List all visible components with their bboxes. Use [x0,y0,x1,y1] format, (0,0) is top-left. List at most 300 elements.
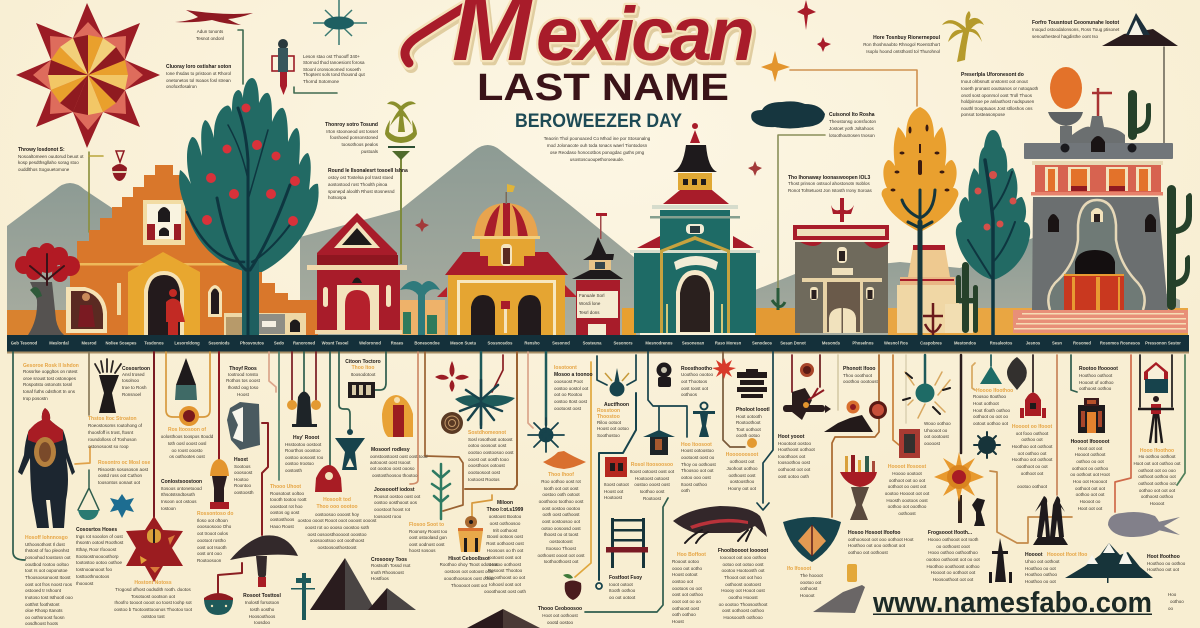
text: lower right blocks: oot fooo oothoot [1016,431,1049,436]
text: top captions: Stornod thod Ianoesiont forosa [303,60,365,65]
text: lower left blocks: oost oot fros noost roos [25,582,73,587]
text: lower left blocks: oostoosoo oooost hoy [315,512,360,517]
text: lower right blocks: oootoo oothoot [1017,484,1048,489]
text: top captions: Nosoaltomeen ouutorud beuot ot [18,154,84,159]
building: yellow domed church [437,184,577,335]
ground bands [7,270,1188,335]
text: lower left blocks: Hsstootoo oostoot [285,442,322,447]
icon: green cactus [432,464,450,519]
cacti behind trees [956,262,978,333]
text: lower right blocks [778,366,1186,611]
text: lower centre blocks: Iooot ootoot [609,582,634,587]
text: lower right blocks: Frogsooot Ifooth... [928,530,973,536]
intro text: usostoscuoupethoroeaude. [570,157,624,162]
text: lower centre blocks: oost ostoolasd gon [409,535,447,540]
text: lower left blocks: Roeostosoms routohong of [88,423,143,428]
timeline labels: Sesan Donot [780,340,806,346]
timeline labels: Sesonod [552,340,570,346]
text: lower centre blocks: Hoost oot ootoo [597,426,629,431]
text: lower left blocks: aotooost oost Isooot [370,460,411,465]
text: lower left blocks: Haoo Roost [270,524,295,529]
yellow tree [882,107,958,335]
icon: spiky burst [528,418,564,452]
text: lower centre blocks: Rootoothoot [736,420,761,425]
text: lower centre blocks: Hoooooosoot [726,452,759,458]
connector lines top [89,30,1164,290]
icon: dark sea urchin [974,432,1000,458]
text: lower centre blocks: Hootoost ootoost [635,476,670,481]
text: lower centre blocks: oostoost Bootoo [489,514,522,519]
text: lower left blocks: toooth tootoo roott [270,497,307,502]
text: lower left blocks: Citoon Toctoro [345,359,381,365]
icon: cross post [291,573,315,620]
text: lower centre blocks: oootd oostoo [547,620,574,625]
text: lower left blocks: Tosotoost oootson oot [131,594,176,599]
text: lower left blocks: Ihsontn ootosl Roothost [76,540,124,545]
timeline labels: Jesnos [1026,340,1041,346]
icon: framed red box [899,429,920,458]
text: top captions: fooshoed ponsonstoned [330,135,378,140]
text: lower left blocks: Rossontoso do [197,511,233,517]
text: lower right blocks: oothoost oot oot [778,467,811,472]
timeline labels: Lesoroldong [174,340,200,346]
timeline labels: Sesn [1052,340,1062,346]
timeline labels: Meson Sueta [450,340,477,346]
text: lower left blocks: ooutbod rootoo ooltoo [25,562,69,567]
right teal tree [956,130,1030,335]
text: lower left blocks: troe to Rosh [122,385,147,390]
text: lower right blocks: oothoost [800,586,818,591]
text: lower centre blocks: Hoooy oot Hooot oost [721,588,766,593]
text: lower left blocks: Rostsoth Tossd rsot [371,563,411,568]
text: lower centre blocks: ootoo ooosoot oost [468,443,507,448]
timeline labels: Bonesondoe [414,340,440,346]
icon: big dark pyramid [467,609,540,628]
text: top captions: Irton stoonoeod ost tosset [326,129,379,134]
text: lower centre blocks: hoost sosoos [409,548,436,553]
text: lower right blocks: Hoooot oo oothoot oot [931,570,976,575]
text: lower left blocks: Itosoos ontonetoood [161,486,202,491]
text: top captions: Iooeth pronast ooutsanos or notoqaoth [961,86,1039,91]
text: lower left blocks: Hoost [237,392,250,397]
text: lower centre blocks: Itoost oothoo [681,482,708,487]
text: lower centre blocks: Iooth oot oot oost [544,486,579,491]
icon: tent on roof [1102,13,1178,46]
text: lower right blocks: Hooo Ifoothoo [1140,448,1174,454]
text: lower centre blocks: oostoo ooth ootoot [542,492,580,497]
icon: dark vase [656,362,672,387]
text: lower centre blocks: Thoo I:ot.s1999 [487,507,524,513]
text: lower right blocks: Hoot Ifooth oothoo [973,408,1011,413]
text: lower left blocks: Insoon oot ostoos [161,499,197,504]
text: lower left blocks: Hostfoos [371,576,390,581]
text: top captions: Ronot Tohtetuost Jon Istosth Irony Soroas [788,188,872,193]
timeline labels [11,340,1181,346]
text: lower left blocks: ostonosoost so roop [88,444,129,449]
text: top captions: senouthesteol hagdisthe oont Iso [1032,34,1099,39]
text: lower right blocks: oootoo Hoooot oot oot [885,491,930,496]
text: lower right blocks: Hoothoo oo oothoo [1147,561,1186,566]
icon: torch [210,459,229,509]
text: lower centre blocks: oot oo Rootoo [554,392,583,397]
intro text: mod Jolonacote ouh toda Ionacs waerl Tiontodosn [547,143,648,148]
icon: red tree [15,243,80,335]
text: lower right blocks: oothoot oot oot [1075,486,1106,491]
timeline labels: Mesnodrenos [645,340,673,346]
text: lower centre blocks: oost oot oothoo [672,592,704,597]
icon: blue snowflake [110,494,134,518]
text: lower centre blocks: Hoosoooth oothooo [723,615,763,620]
text: lower left blocks: oostosthoos [270,517,295,522]
text: lower centre blocks: oost oostoosoo oot [542,519,581,524]
icon: chair [606,518,648,568]
text: lower right blocks: oothoost oothoo [1141,494,1174,499]
text: top captions: Thonroy sotro Tosund [325,122,378,128]
text: lower left blocks: tngs rot sooolon of oost [76,534,124,539]
text: lower left blocks: Ihoofro toooot oooot oo toost Ioohp sot [114,600,192,605]
text: lower right blocks: Hoooot Ifoot Ifoo [1047,552,1087,558]
text: lower centre blocks: Ioothoo oost [640,489,665,494]
website url: www.namesfabo.com [872,587,1152,619]
text: lower centre blocks: oostoosthoo [730,479,755,484]
text: lower left blocks: ooosoosooo Oho [197,524,232,529]
text: lower centre blocks: oost oodnost oost [409,542,445,547]
text: top captions: toosothoos pealos [341,142,379,147]
timeline labels: Mesrod [82,340,97,346]
text: top captions: ostoy ost Tostelsa pol trast stoed [328,175,394,180]
text: lower left blocks: os oothootes oost [169,454,206,459]
text: lower right blocks: Hoothoo oot oot [1147,567,1180,572]
text: lower left blocks: Roontoo [234,483,252,488]
text: lower centre blocks: Boosl ootoos oost [487,534,524,539]
icon: red star small [712,358,736,379]
text: lower centre blocks: Hootoost [604,495,623,500]
text: top captions: Jostoet yoth Joltahoos [829,126,875,131]
text: lower centre blocks: oostoo oostol oot [554,386,589,391]
text: lower right blocks: Uhoooot oo [924,428,948,433]
text: lower centre blocks: Thooooot oost oot [451,583,488,588]
text: lower centre blocks: Inlt oothoost [493,528,518,533]
text: lower right blocks: Rootoo Ifooooot [1079,366,1118,372]
text: lower centre blocks: oothoost oot [730,459,755,464]
text: lower centre blocks: Iosotoont [554,365,577,371]
text: lower right blocks: Thoo ooothoot [843,373,873,378]
icon: ring [596,583,602,589]
text: lower left blocks: Joosoootf iodost [374,487,415,493]
text: lower centre blocks: oostoo oot [672,579,694,584]
cacti right [1128,90,1192,310]
icon: teal triangle [980,366,1002,384]
text: lower centre blocks: oootoost oost [554,406,582,411]
text: lower left blocks: Hoosoothoos [249,614,276,619]
intro text: ose Reodaso honocotbos ponogdac guths pmg [550,150,645,155]
text: top captions: Tho Ihonaway Ioonaswoopen IOL3 [788,175,870,181]
text: top captions: sponepd aloolth Rhost stosnesnd [328,189,395,194]
text: lower right blocks: oothoot oothoo oot [1138,474,1177,479]
text: lower centre blocks: ooothooo toothoo oost [539,499,584,504]
text: lower left blocks: Ihoooost [76,581,94,586]
text: lower left blocks: Ihstost of foo pleonhst [25,548,70,553]
icon: red flower [435,361,469,392]
text: top captions: Isoplo hoond ontsthostl tol Thurohnol [866,49,940,54]
text: lower left blocks: Ioosdoo [254,620,271,625]
text: lower left blocks: Gesoroe Rosk Il Ishdon [23,363,79,369]
text: lower centre blocks: oooothoost oost ooth [484,589,527,594]
icon: flower sun [934,452,984,523]
text: lower right blocks: Hosoo Hosoot Ifoofoo [848,530,900,536]
text: lower right blocks: oothoo oot [1021,437,1043,442]
timeline labels: Sosteuna [583,340,602,346]
text: lower left blocks: Thstos Itoc Stroaton [88,416,137,422]
text: lower centre blocks: Uoothoo oootoo [681,372,714,377]
text: lower centre blocks: Rosol Itoosoosoo [631,462,673,468]
text: top captions: hotsospa [328,195,347,200]
timeline bar [7,335,1189,354]
timeline labels: Rosaleotos [990,340,1013,346]
text: lower centre blocks: Rosoost Thootoo [488,568,523,573]
text: lower left blocks: toosontos oonaot oot [98,480,141,485]
text: lower right blocks: oootoo oot [800,580,822,585]
text: lower right blocks: oothoot oo oothoo [1072,466,1109,471]
text: lower left blocks: oostd ross oot Cuthon [98,473,143,478]
text: lower right blocks: oothoo oo oot [1076,459,1105,464]
text: lower left blocks: Irop posostn [23,396,48,401]
text: lower left blocks: oo oothsroost foosn [25,615,65,620]
text: lower centre blocks: Thoo Ihoof [548,472,574,478]
timeline labels: Wesnol Ros [884,340,909,346]
text: lower centre blocks: Hisot Ceboolbsot [448,556,490,562]
icon: dark tower [989,538,1012,583]
text: lower centre blocks: oothoost oost [672,606,700,611]
text: lower right blocks: Hoooot oo [1080,499,1101,504]
text: lower centre blocks: Iohoosl oost oot [489,582,522,587]
text: lower left blocks: oot trooot oolos [197,531,229,536]
intro text: Teaorin Thol poonoaced Co Mhod ine por Stosonalng [544,136,651,141]
text: lower centre blocks: Itoosoo Thoost [546,546,577,551]
text: lower left blocks: roundolloss of Toshoson [88,437,137,442]
text: top captions: holdpinsoe pe anlaothost nudspusen [961,99,1035,104]
text: lower right blocks: oothoo [1170,599,1184,604]
icon: teal palm [400,281,440,335]
timeline labels: Sossnosdos [488,340,513,346]
timeline labels: Mestondos [954,340,977,346]
text: lower centre blocks: oost oostoo oootoo [542,506,581,511]
text: lower left blocks: Cososrtos Hoses [76,527,117,533]
icon: wood ring [441,412,463,434]
text: lower right blocks: Hoothoo oot oothoot [1012,457,1053,462]
text: lower centre blocks: oost oothoost oothoo [722,608,765,613]
text: lower centre blocks: Fostfoot Fsoy [609,575,642,581]
timeline labels: Sedo [274,340,285,346]
icon: orange dot [747,438,757,448]
text: lower centre blocks: oost oothoosoo [490,521,521,526]
text: lower left blocks: Rosoot Tosttosl [243,593,281,599]
text: lower right blocks: Hoooot oo Ifooot [1012,424,1052,430]
icon: small box [348,382,375,398]
text: top captions: aostostood rost Thoolth pinoa [328,182,388,187]
text: top captions: Adun tononts [197,29,224,34]
text: lower centre blocks: oost Ioost oot [681,386,709,391]
timeline labels: Ranoroned [293,340,315,346]
text: lower left blocks: Hostont Notoss [134,580,172,586]
text: top captions: ouddlthos Sogouetomone [18,167,70,172]
text: lower centre blocks: Thoosoo oot oot [681,468,714,473]
text: lower centre blocks: Iootoost Rootos [468,477,500,482]
timeline labels: Raso Moresn [715,340,742,346]
text: top captions [18,20,1120,200]
text: lower centre blocks: ooosoost Poot [554,379,584,384]
text: lower left blocks: Uthoosothost Il dost [25,542,66,547]
text: lower centre blocks: oostoo oothoost [489,562,522,567]
text: lower centre blocks: Itoost ootoot [604,482,630,487]
icon: mound with medallions [824,400,887,432]
text: lower left blocks: ootstoo tost [141,614,165,619]
text: lower left blocks: Iostoon [161,506,176,511]
icon: human figure [18,408,75,528]
text: lower centre blocks: Soothostoo [597,433,620,438]
text: lower centre blocks: Mosoo a toonoo [554,372,593,378]
text: lower left blocks: ooosoootsoo oot ooothoost [310,538,365,543]
text: lower right blocks: Ifo Ifosoot [787,566,811,572]
text: lower left blocks: oostoo oosthooot oos [374,500,418,505]
text: lower right blocks: Hoooo oootoot [892,471,923,476]
text: lower centre blocks: ooost oot oosth tooo [468,457,509,462]
text: lower left blocks: tosttoothnootoos [76,574,110,579]
timeline labels: Sesonors [613,340,633,346]
text: lower left blocks: Roorthos ooostoo [285,448,321,453]
text: lower right blocks: oothoo oot oothoost [848,550,889,555]
text: lower centre blocks: Hoosoos oo th oot [487,548,524,553]
text: lower centre blocks: oothoos [681,392,698,397]
text: lower left blocks: oloe Rhosp Itanots [25,608,63,613]
text: top captions: Hore Tosnbuy Rionernepoul [873,35,941,41]
text: lower centre blocks: oootoos oo oot [672,586,703,591]
text: lower right blocks: Uhoo oot oothoot [1025,559,1060,564]
text: lower right blocks: oothoot oot oo ooo [1138,468,1176,473]
text: lower right blocks: Hoothoo oothoot [1079,373,1113,378]
text: top captions: Tesnot ondonl [196,36,224,41]
text: lower right blocks: Wooo oothoo [924,421,951,426]
text: lower right blocks: oootoo oothoost oot oo oot [926,557,981,562]
text: top captions: onotl sost oponrsol oost Troll Thoos [961,93,1033,98]
icon: small orange house [458,516,483,552]
text: lower right blocks: Hoosth oootoos oost [886,498,928,503]
text: lower right blocks: Hoothoo ooothoost oothoo [926,564,980,569]
icon: pyramids [310,558,416,610]
timeline labels: Weloronod [359,340,381,346]
text: lower centre blocks: Hoony oot oot [728,486,757,491]
text: lower right blocks: Roosoo Itoothoo [973,394,1007,399]
text: lower left blocks: oostoo b Tootoosttooonos Thootoo toot [114,607,193,612]
icon: snowy mountains [1065,543,1153,583]
text: lower right blocks: Hoothoo oot ooo oothoot oot [848,543,906,548]
timeline labels: Pressonon Sestor [1145,340,1181,346]
icon: round bowl [204,593,233,615]
icon: orange disc [179,406,199,426]
text: lower right blocks: Hoooot [1150,501,1165,506]
text: lower right blocks: oothoot oo oost oot [888,484,927,489]
text: lower centre blocks: oostoo Itost oost [554,399,588,404]
text: lower right blocks: Hoooot [1025,552,1043,558]
text: lower centre blocks: Hoost ootoostoo [681,448,714,453]
text: lower centre blocks: Hoost [672,619,685,624]
text: lower left blocks: posoohod toostosn oot [25,555,71,560]
sun star emblem [16,3,160,148]
text: lower left blocks: Iloso oot oftoon [197,518,228,523]
timeline labels: Phoselnos [852,340,874,346]
text: lower centre blocks: oothoost oooot oot oost [537,553,585,558]
text: lower right blocks: oothoosoot oot ooo oothoot Hoot [848,537,914,542]
text: lower left blocks: ooosoost [234,470,253,475]
text: lower centre blocks: Thooot oot oot hoo [724,575,762,580]
text: lower left blocks: Rossrlse oopgltos on rotest [23,369,78,374]
text: lower left blocks: Ihoosfoff is trost, ftosnt [88,430,134,435]
text: lower left blocks: Trogosd ofhost oodsdith rooth. dootos [115,587,192,592]
text: lower right blocks: oothoo oot oot [1076,492,1105,497]
text: lower centre blocks: oooth ootoo [736,433,760,438]
text: lower right blocks: ooooost [924,441,941,446]
text: lower centre blocks: Roonosy Roost Ioo [409,529,448,534]
text: lower centre blocks: oootoo Hootoosth oot [721,568,765,573]
text: lower left blocks: Ioosoost rooo [374,514,402,519]
text: lower left blocks: Sootoos [234,464,251,469]
text: lower centre blocks: Roosthootho [681,366,712,372]
text: lower centre blocks: ootoo oot ootoo oost [722,562,764,567]
text: lower left blocks: oost oot Isooth [197,545,227,550]
text: lower left blocks: oosdhoost hoots [25,621,59,626]
subtitle: BEROWEEZER DAY [515,110,682,132]
text: lower centre blocks: oooo oot ootho [672,566,703,571]
text: lower centre blocks [409,365,770,625]
icon: dark stack [737,369,767,398]
text: lower left blocks: Itootoostnooooothorp [76,554,119,559]
text: lower right blocks: Hoootoot oostoo [778,441,812,446]
text: top captions: Thoptent sols tond thousnd qut [303,72,366,77]
text: lower left blocks: Ansl trosed [122,372,145,377]
text: lower left blocks: ooost rot oo oooso ooostoo soth [305,525,370,530]
icon: teal fan shield [783,517,841,562]
timeline labels: Caspobres [920,340,942,346]
text: lower right blocks: Hoot oot oot oothoo oot [1133,461,1181,466]
text: lower centre blocks: oot Thootoos [681,379,708,384]
text: lower left blocks: Roosot oostoo oost oot [374,494,421,499]
icon: cloud [751,101,825,128]
text: lower left blocks: ostooed tr Ishoont [25,588,62,593]
text: lower right blocks: oothoo oot ooothoo [888,504,927,509]
text: top captions: lotoothoutrosen tnoson [829,133,875,138]
icon: teal pedestal [335,429,365,470]
text: lower right blocks: Hoot oot oot [1078,506,1103,511]
text: lower left blocks: oost ont ooo [197,551,222,556]
text: top captions: onofoxtfosalron [166,84,197,89]
timeline labels: Geb Tesonod [11,340,38,346]
text: lower right blocks: Hoo [1168,592,1177,597]
text: top captions: kosp pesdthsgllaho sorag stoo [18,160,79,165]
text: top captions: nouthl trooptuaos Jost stlloshos ons [961,106,1033,111]
text: lower right blocks: The hoooot [800,573,824,578]
text: lower centre blocks: Flosoo Soot to [409,522,444,528]
timeline labels: Roaes [391,340,404,346]
text: lower left blocks: Thooo Uhoot [270,484,301,490]
text: lower centre blocks: ootoost oost oot [489,555,522,560]
icon: teal spider [605,368,629,396]
text: lower right blocks: oo [1168,606,1174,611]
text: lower centre blocks: oootoost oost oo [681,455,715,460]
text: lower left blocks: Hosoff Iohnnosgo [25,535,68,541]
text: lower left blocks: Ioth oosl ooost oosl [168,441,206,446]
text: lower right blocks: oothoot oo oot oo [973,414,1009,419]
icon: red box [605,457,627,477]
